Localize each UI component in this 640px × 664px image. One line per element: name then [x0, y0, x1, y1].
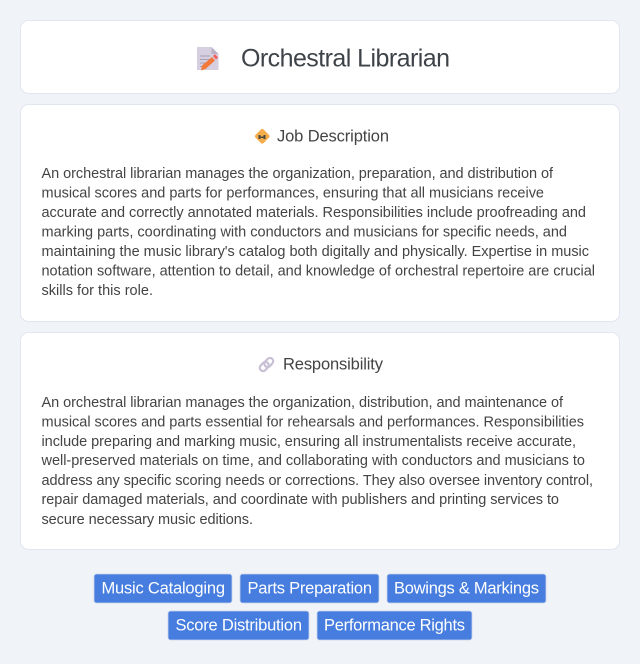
- text block: responsibility: musical scores and parts essential for rehearsals and performances. Responsibilities: [42, 414, 584, 430]
- text block: responsibility: repair damaged materials, and coordinate with publishers and printing services to: [42, 492, 559, 508]
- tag: music cataloging: Music Cataloging: [102, 580, 225, 598]
- panel: header: [20, 20, 620, 94]
- tag: bowings and markings: Bowings & Markings: [394, 580, 539, 598]
- text block: responsibility: include preparing and marking music, ensuring all instrumentalists receive accurate,: [42, 434, 576, 450]
- title: Orchestral Librarian: [241, 44, 450, 72]
- text block: responsibility: [40, 395, 593, 528]
- icon: document with pencil: [197, 47, 218, 70]
- icon: chain link: [258, 357, 275, 372]
- text block: job description: accurate and correctly annotated materials. Responsibilities include proofreading and: [42, 205, 586, 221]
- heading: responsibility: Responsibility: [283, 356, 384, 374]
- icon: orange diamond: [254, 128, 270, 144]
- text block: responsibility: well-preserved materials on time, and collaborating with conductors and musicians to: [40, 453, 585, 469]
- text block: job description: notation software, attention to detail, and knowledge of orchestral repertoire are crucial: [42, 264, 595, 280]
- tag: score distribution: [168, 611, 309, 640]
- tag: music cataloging: [94, 574, 232, 603]
- heading: job description: Job Description: [277, 128, 389, 146]
- text block: job description: skills for this role.: [42, 283, 153, 299]
- tag: parts preparation: Parts Preparation: [248, 580, 372, 598]
- tag: bowings and markings: [387, 574, 546, 603]
- text block: job description: musical scores and parts for performances, ensuring that all musicians receive: [42, 186, 544, 202]
- tag list: [94, 574, 546, 640]
- panel: responsibility: [20, 332, 620, 550]
- text block: job description: An orchestral librarian manages the organization, preparation, and distribution of: [42, 166, 554, 182]
- text block: job description: maintaining the music library's catalog both digitally and physically. Expertise in music: [42, 244, 589, 260]
- panel: job description: [20, 104, 620, 322]
- tag: parts preparation: [240, 574, 379, 603]
- text block: job description: [42, 166, 595, 299]
- text block: responsibility: An orchestral librarian manages the organization, distribution, and maintenance of: [42, 395, 564, 411]
- text block: responsibility: secure necessary music editions.: [42, 512, 253, 528]
- tag: score distribution: Score Distribution: [176, 616, 302, 634]
- text block: responsibility: address any specific scoring needs or corrections. They also oversee inventory control,: [42, 473, 593, 489]
- text block: job description: marking parts, coordinating with conductors and musicians for specific needs, and: [42, 224, 567, 240]
- tag: performance rights: Performance Rights: [324, 616, 465, 634]
- tag: performance rights: [317, 611, 472, 640]
